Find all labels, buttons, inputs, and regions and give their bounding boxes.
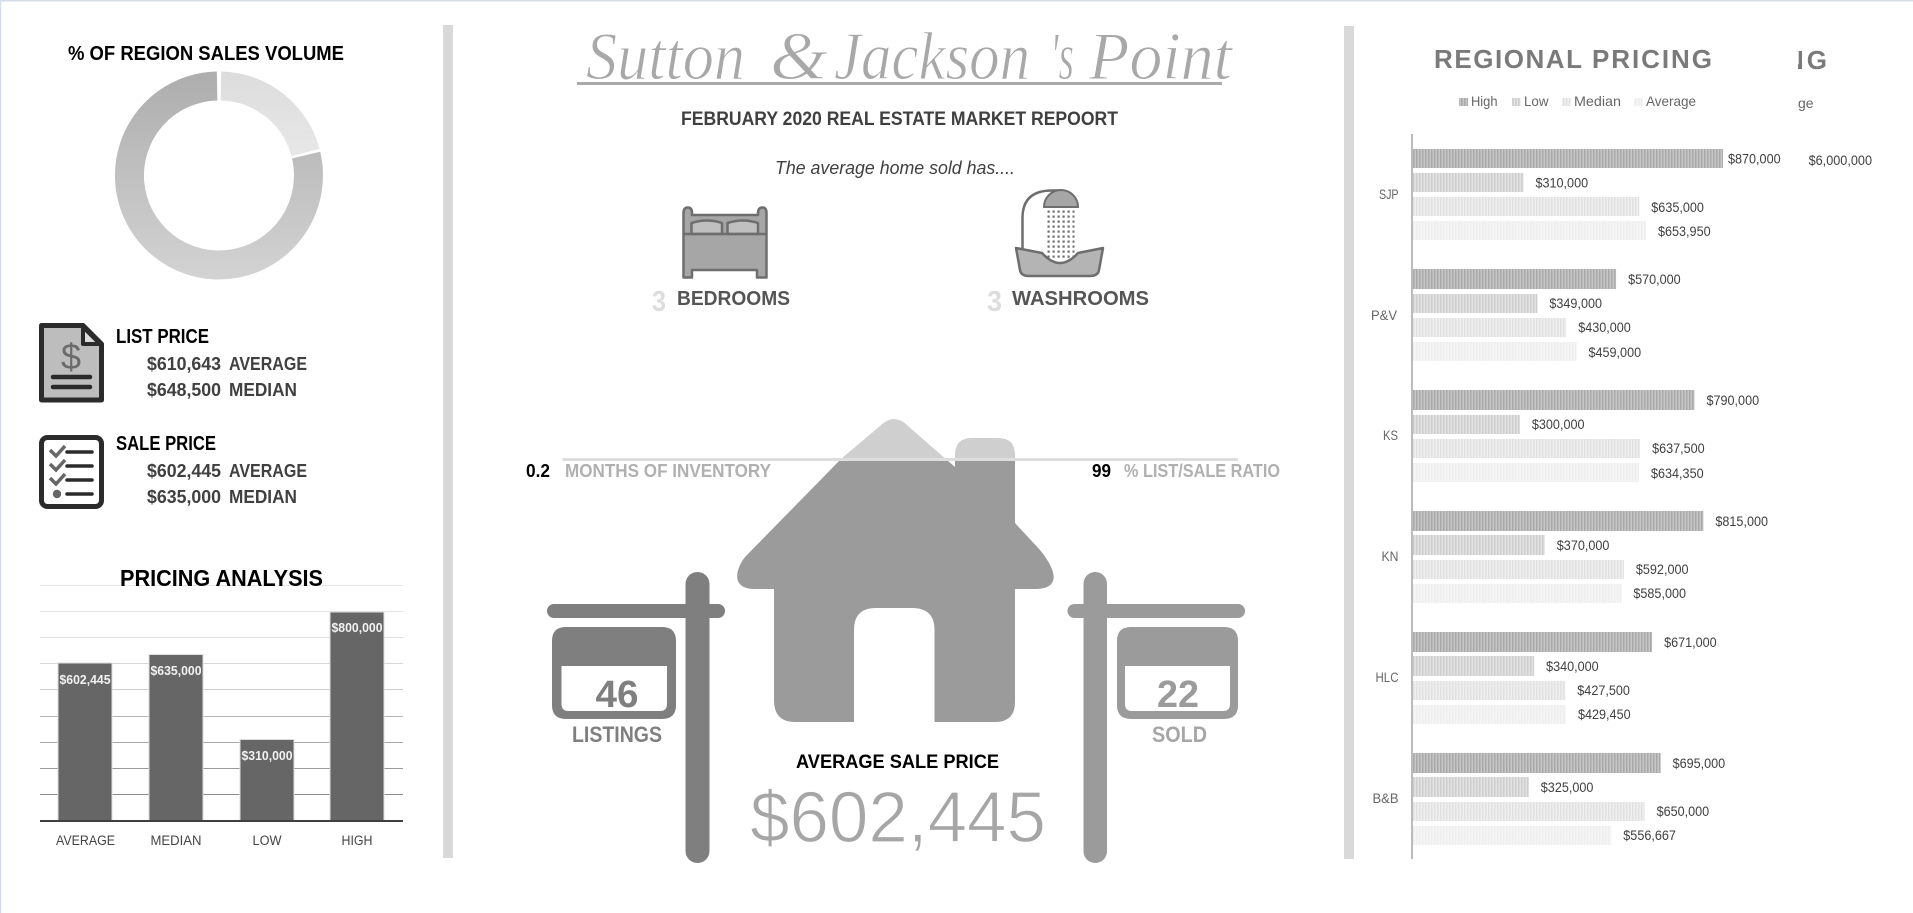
heading: region sales volume: % OF REGION SALES VOLUME bbox=[68, 43, 344, 65]
sign: sold: 22 bbox=[1157, 674, 1199, 716]
bar group: HLC: HLC bbox=[1376, 670, 1399, 685]
bar group: KN bbox=[1382, 511, 1768, 603]
list/sale ratio stat: 99 bbox=[1092, 461, 1111, 481]
category labels bbox=[56, 833, 372, 848]
category labels: MEDIAN bbox=[150, 833, 202, 848]
donut chart bbox=[129, 86, 308, 265]
bar group: KN: $585,000 bbox=[1633, 586, 1686, 601]
title: Jackson bbox=[834, 18, 1030, 94]
intro line: The average home sold has.... bbox=[775, 157, 1015, 178]
text block: list price: MEDIAN bbox=[229, 380, 297, 400]
months of inventory stat: MONTHS OF INVENTORY bbox=[565, 460, 772, 481]
average sale price label: AVERAGE SALE PRICE bbox=[796, 752, 999, 773]
bar group: B&B: $695,000 bbox=[1673, 756, 1725, 771]
bar value labels: $602,445 bbox=[60, 672, 110, 687]
bar group: SJP: SJP bbox=[1379, 187, 1398, 202]
bar group: SJP: $870,000 bbox=[1728, 152, 1781, 166]
icon: price document: $ bbox=[61, 336, 81, 377]
washrooms stat: WASHROOMS bbox=[1012, 288, 1149, 310]
bedrooms stat: 3 bbox=[652, 286, 666, 318]
legend bbox=[1459, 93, 1696, 109]
text block: sale price: $602,445 bbox=[147, 461, 221, 481]
text block: sale price: AVERAGE bbox=[229, 461, 307, 481]
bar group: KS: KS bbox=[1383, 428, 1398, 443]
icon: house bbox=[737, 419, 1054, 722]
title: Sutton bbox=[586, 18, 745, 94]
bedrooms stat bbox=[652, 286, 790, 318]
text block: list price bbox=[116, 326, 307, 400]
bar group: KS: $637,500 bbox=[1652, 441, 1705, 456]
title: 's bbox=[1050, 18, 1074, 94]
title: Point bbox=[1088, 18, 1234, 94]
bar group: KN: $370,000 bbox=[1557, 538, 1609, 553]
legend: Median bbox=[1574, 93, 1621, 109]
bar chart: pricing analysis bbox=[40, 565, 403, 848]
icon: price document bbox=[42, 326, 102, 400]
text block: list price: $648,500 bbox=[147, 380, 221, 400]
bar value labels: $635,000 bbox=[150, 663, 202, 678]
clipped title remnant: NG bbox=[1785, 45, 1830, 75]
bar group: KN: KN bbox=[1382, 549, 1398, 564]
bar group: KN: $592,000 bbox=[1636, 562, 1688, 577]
bar group: KN: $815,000 bbox=[1715, 514, 1768, 529]
bar group: B&B: $556,667 bbox=[1623, 828, 1676, 843]
legend: Low bbox=[1524, 93, 1549, 109]
chart title: REGIONAL bbox=[1434, 44, 1582, 74]
bar group: P&V: $570,000 bbox=[1628, 272, 1681, 287]
sign: listings bbox=[547, 572, 725, 863]
bar group: KS: $300,000 bbox=[1532, 417, 1584, 432]
bar group: HLC: $340,000 bbox=[1546, 659, 1599, 674]
washrooms stat bbox=[987, 286, 1149, 318]
months of inventory stat: 0.2 bbox=[526, 461, 550, 481]
bar value labels: $800,000 bbox=[332, 620, 382, 635]
washrooms stat: 3 bbox=[987, 286, 1002, 318]
chart title: PRICING ANALYSIS bbox=[120, 565, 323, 591]
text block: sale price: SALE PRICE bbox=[116, 433, 216, 455]
icon: checklist bbox=[42, 438, 102, 506]
category labels: LOW bbox=[252, 833, 282, 848]
title: & bbox=[770, 18, 828, 94]
bar group: SJP: $310,000 bbox=[1536, 176, 1588, 190]
bar group: HLC: $427,500 bbox=[1577, 683, 1630, 698]
list/sale ratio stat: % LIST/SALE RATIO bbox=[1124, 460, 1280, 481]
bar group: P&V: $459,000 bbox=[1588, 345, 1641, 360]
bar group: HLC bbox=[1376, 632, 1717, 724]
bar group: B&B bbox=[1372, 753, 1725, 845]
bar group: P&V: $349,000 bbox=[1549, 296, 1602, 311]
bar group: KS bbox=[1383, 390, 1759, 482]
bar group: HLC: $429,450 bbox=[1578, 707, 1631, 722]
text block: sale price: $635,000 bbox=[147, 487, 221, 507]
sign: listings: 46 bbox=[596, 674, 638, 716]
sign: sold: SOLD bbox=[1152, 722, 1207, 747]
bar group: B&B: $325,000 bbox=[1541, 780, 1593, 795]
chart title bbox=[1434, 44, 1712, 74]
bar group: P&V: $430,000 bbox=[1578, 320, 1631, 335]
bar group: P&V: P&V bbox=[1371, 308, 1397, 323]
category labels: HIGH bbox=[342, 833, 372, 848]
icon: bed bbox=[684, 208, 766, 278]
bar group: KS: $790,000 bbox=[1706, 393, 1759, 408]
bar value labels: $310,000 bbox=[242, 748, 292, 763]
bar group: B&B: $650,000 bbox=[1657, 804, 1709, 819]
bar group: SJP bbox=[1379, 149, 1781, 240]
sign: sold bbox=[1068, 572, 1245, 863]
panel: centre column bbox=[526, 18, 1280, 863]
average sale price value: $602,445 bbox=[750, 778, 1046, 858]
bar group: HLC: $671,000 bbox=[1664, 635, 1717, 650]
text block: sale price bbox=[116, 433, 307, 507]
bar group: SJP: $653,950 bbox=[1658, 224, 1711, 239]
legend: High bbox=[1471, 93, 1498, 109]
text block: sale price: MEDIAN bbox=[229, 487, 297, 507]
title bbox=[586, 18, 1234, 94]
category labels: AVERAGE bbox=[56, 833, 115, 848]
bar group: B&B: B&B bbox=[1372, 791, 1398, 806]
text block: list price: $610,643 bbox=[147, 354, 221, 374]
bar value labels bbox=[60, 620, 382, 763]
subtitle: FEBRUARY 2020 REAL ESTATE MARKET REPOORT bbox=[681, 109, 1118, 130]
clipped axis value: $6,000,000 bbox=[1809, 153, 1872, 168]
chart title: PRICING bbox=[1592, 44, 1712, 74]
bedrooms stat: BEDROOMS bbox=[677, 288, 790, 310]
sign: listings: LISTINGS bbox=[572, 722, 662, 747]
clipped legend remnant: ge bbox=[1798, 95, 1814, 111]
panel: regional pricing bbox=[1371, 44, 1872, 859]
legend: Average bbox=[1646, 93, 1696, 109]
bar group: SJP: $635,000 bbox=[1651, 200, 1704, 215]
icon: shower and tub bbox=[1016, 190, 1103, 276]
bars bbox=[58, 612, 384, 821]
text block: list price: AVERAGE bbox=[229, 354, 307, 374]
text block: list price: LIST PRICE bbox=[116, 326, 209, 348]
bar group: P&V bbox=[1371, 269, 1681, 361]
bar group: KS: $634,350 bbox=[1651, 466, 1704, 481]
